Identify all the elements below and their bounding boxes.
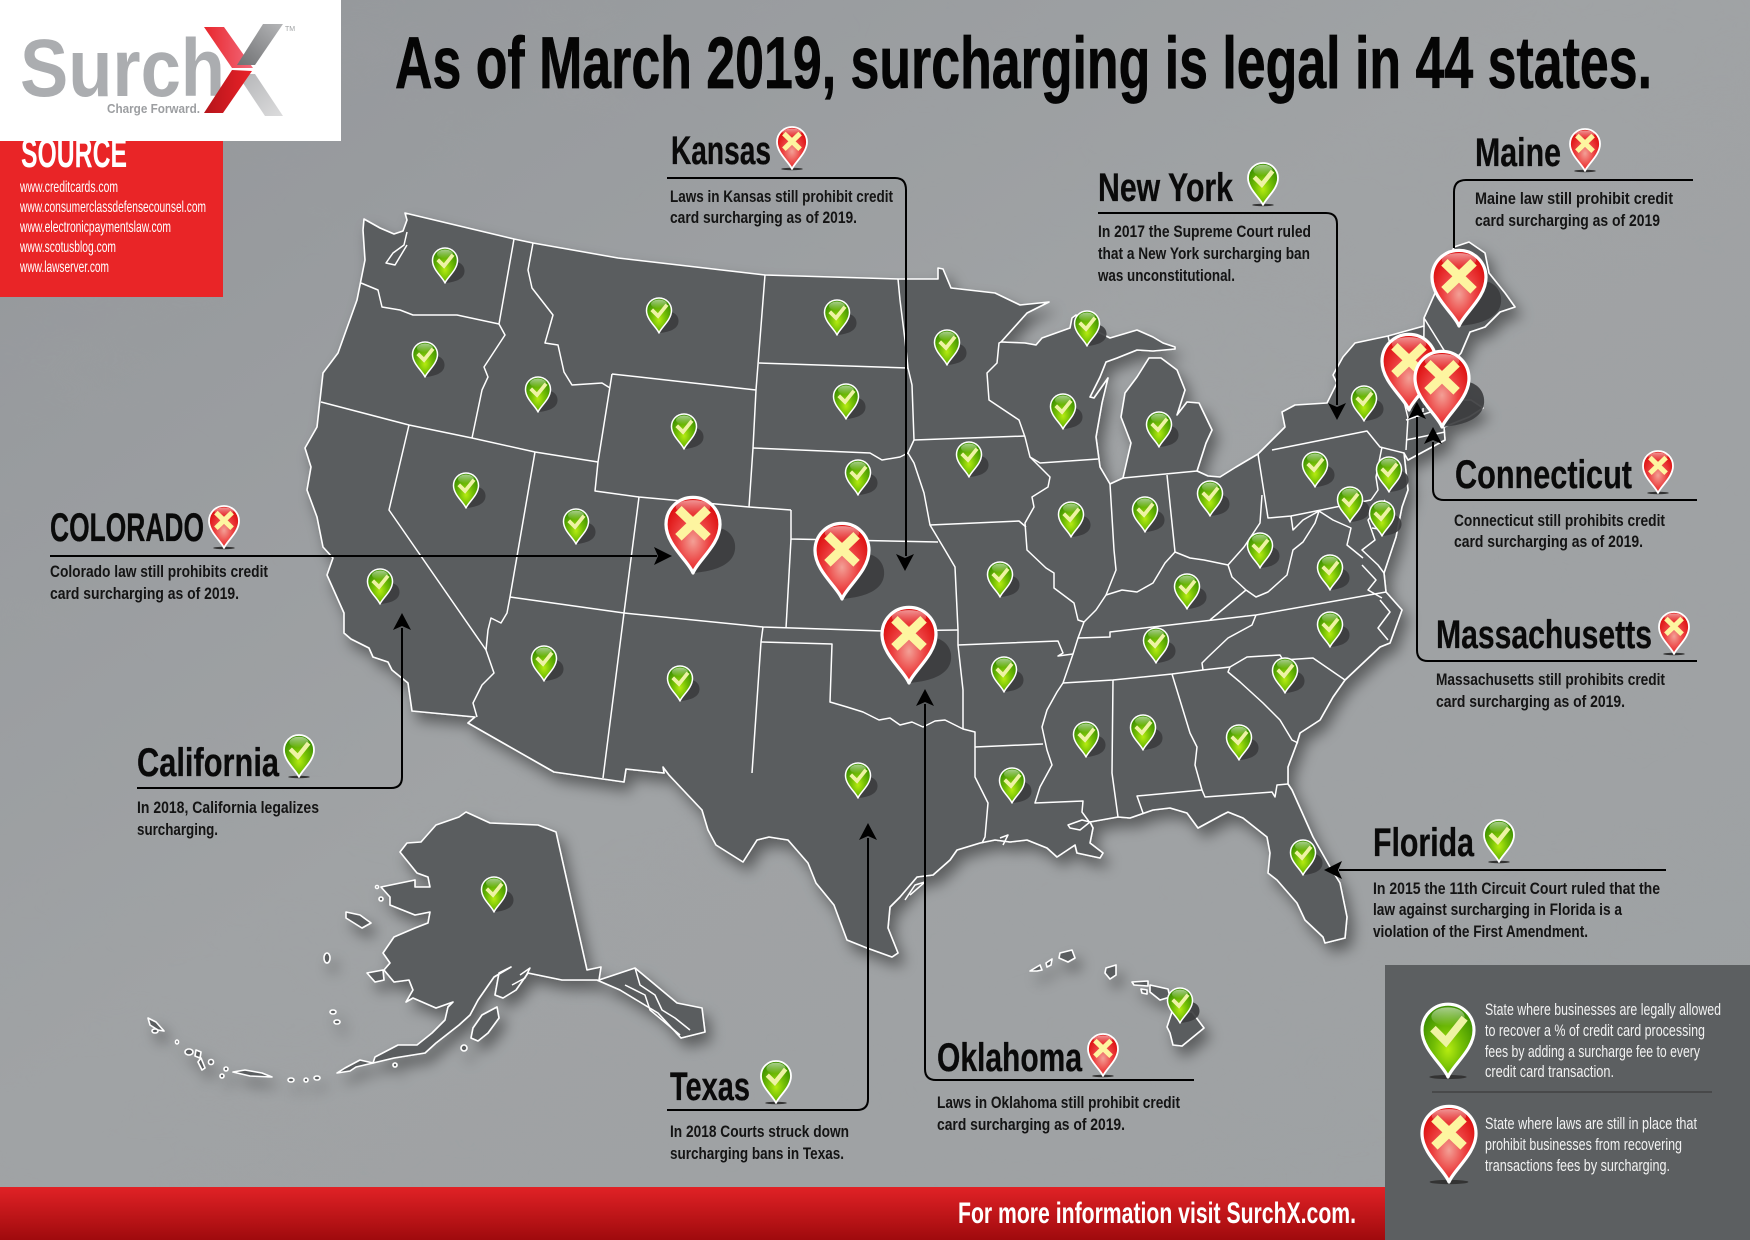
pin: Michigan xyxy=(1146,412,1179,447)
callout: New York xyxy=(1097,163,1346,420)
callout: Kansas: Kansas xyxy=(671,129,771,173)
pin: Minnesota xyxy=(934,330,967,365)
callout: Texas xyxy=(667,823,877,1163)
footer bar xyxy=(0,1187,1385,1240)
callout: Oklahoma xyxy=(916,689,1194,1134)
panel: source list: www.electronicpaymentslaw.com xyxy=(19,219,171,236)
pin: Florida xyxy=(1290,840,1323,875)
state borders xyxy=(321,232,1452,1035)
pin: Connecticut xyxy=(1415,351,1484,427)
legend text: prohibited: prohibit businesses from recovering xyxy=(1485,1135,1682,1154)
pin: North Carolina xyxy=(1318,612,1350,647)
pin: Wyoming xyxy=(672,414,704,449)
callout: New York: that a New York surcharging ban xyxy=(1098,245,1310,263)
logo: SurchX: Charge Forward. xyxy=(107,102,200,116)
pin: Michigan upper peninsula xyxy=(1074,311,1107,346)
legend text: prohibited: transactions fees by surcharging. xyxy=(1485,1156,1670,1175)
callout: California xyxy=(137,613,411,839)
legend text: legal xyxy=(1485,1000,1721,1081)
callout: Colorado: card surcharging as of 2019. xyxy=(50,585,239,603)
logo: SurchX: TM xyxy=(285,26,295,33)
pin: New York state xyxy=(1352,386,1384,421)
pin: South Carolina xyxy=(1272,658,1305,693)
pin: Virginia xyxy=(1318,555,1350,590)
logo: SurchX: Surch xyxy=(20,23,225,114)
map pins: permitted states xyxy=(368,248,1409,1023)
pin: Nebraska xyxy=(846,460,878,495)
callout: California: California xyxy=(137,741,280,785)
callout: Oklahoma: Laws in Oklahoma still prohibit credit xyxy=(937,1094,1180,1112)
callout: Massachusetts: card surcharging as of 2019. xyxy=(1436,693,1625,711)
pin: Hawaii xyxy=(1168,988,1200,1023)
pin: Idaho xyxy=(526,377,558,412)
callout: Massachusetts xyxy=(1408,402,1697,711)
pin: Pennsylvania xyxy=(1302,452,1335,487)
pin: Arkansas xyxy=(992,657,1024,692)
pin: Washington xyxy=(432,248,465,283)
callout: Oklahoma: Oklahoma xyxy=(937,1036,1083,1080)
callout: Massachusetts: Massachusetts xyxy=(1436,613,1652,657)
panel: source list: www.scotusblog.com xyxy=(19,239,116,256)
legend text: prohibited xyxy=(1485,1114,1697,1175)
pin: Utah xyxy=(564,509,596,544)
pin: Texas xyxy=(846,763,878,798)
pin: West Virginia xyxy=(1248,533,1280,568)
pin: Maine xyxy=(1432,250,1501,326)
pin: Iowa xyxy=(956,442,989,477)
callout: Florida: law against surcharging in Florida is a xyxy=(1373,901,1623,919)
callout: Florida xyxy=(1324,820,1666,941)
pin: California xyxy=(368,569,400,604)
pin: Ohio xyxy=(1198,481,1230,516)
callout: Connecticut: Connecticut still prohibits credit xyxy=(1454,512,1665,530)
panel: source list: www.lawserver.com xyxy=(19,259,109,276)
pin: Montana xyxy=(646,298,679,333)
callout: Texas: In 2018 Courts struck down xyxy=(670,1123,849,1141)
callout: California: In 2018, California legalizes xyxy=(137,799,319,817)
callout: Maine: Maine xyxy=(1475,131,1561,175)
callout: Connecticut: Connecticut xyxy=(1455,453,1632,497)
callout: Oklahoma: card surcharging as of 2019. xyxy=(937,1116,1125,1134)
pin: North Dakota xyxy=(824,300,857,335)
footer bar: For more information visit SurchX.com. xyxy=(958,1197,1356,1230)
callout: Connecticut xyxy=(1424,427,1697,551)
map pins: prohibited states xyxy=(666,250,1501,683)
callout: Colorado: Colorado law still prohibits credit xyxy=(50,563,268,581)
pin: Arizona xyxy=(532,646,564,681)
panel: source list: www.consumerclassdefensecounsel.com xyxy=(19,199,206,216)
pin: Massachusetts xyxy=(1382,334,1451,410)
pin: Tennessee xyxy=(1144,628,1176,663)
panel: legend xyxy=(1385,965,1750,1240)
callout: Florida: violation of the First Amendment. xyxy=(1373,923,1588,941)
pin: Georgia xyxy=(1226,725,1259,760)
panel: source list xyxy=(0,120,223,297)
icon: prohibited state pin xyxy=(1422,1106,1476,1184)
callout: Texas: Texas xyxy=(670,1065,750,1109)
pin: Nevada xyxy=(454,473,486,508)
pin: Alabama xyxy=(1130,715,1163,750)
callout: New York: In 2017 the Supreme Court ruled xyxy=(1098,223,1311,241)
callout: Colorado: COLORADO xyxy=(50,506,204,550)
pin: New Mexico xyxy=(668,666,700,701)
pin: Wisconsin xyxy=(1050,394,1083,429)
callout: Maine: Maine law still prohibit credit xyxy=(1475,190,1673,208)
pin: Illinois xyxy=(1058,502,1091,537)
callout: New York: New York xyxy=(1098,166,1234,210)
pin: Kansas xyxy=(815,523,884,599)
icon: legal state pin xyxy=(1422,1004,1474,1079)
legend text: legal: credit card transaction. xyxy=(1485,1062,1614,1081)
callout: Colorado xyxy=(50,506,672,603)
callout: Kansas xyxy=(667,127,914,571)
pin: Colorado xyxy=(666,497,735,573)
panel: source list: SOURCE xyxy=(21,130,127,176)
callout: Texas: surcharging bans in Texas. xyxy=(670,1145,844,1163)
callout: Maine xyxy=(1454,129,1693,248)
callout: New York: was unconstitutional. xyxy=(1097,267,1235,285)
pin: South Dakota xyxy=(834,384,866,419)
pin: Alaska xyxy=(482,877,514,912)
pin: Oklahoma xyxy=(882,607,951,683)
pin: Mississippi xyxy=(1074,722,1106,757)
pin: New Jersey xyxy=(1376,457,1409,492)
map of the United States xyxy=(148,213,1515,1082)
callout: Kansas: Laws in Kansas still prohibit credit xyxy=(670,188,893,206)
callout: Florida: In 2015 the 11th Circuit Court ruled that the xyxy=(1373,880,1660,898)
land masses xyxy=(148,213,1515,1082)
pin: Kentucky xyxy=(1174,574,1207,609)
callout: Kansas: card surcharging as of 2019. xyxy=(670,209,857,227)
pin: Missouri xyxy=(988,562,1020,597)
callout: Maine: card surcharging as of 2019 xyxy=(1475,212,1660,230)
pin: Oregon xyxy=(412,342,445,377)
panel: source list: www.creditcards.com xyxy=(19,179,118,196)
callout: Florida: Florida xyxy=(1373,821,1475,865)
callout: Connecticut: card surcharging as of 2019. xyxy=(1454,533,1643,551)
callout: California: surcharging. xyxy=(137,821,218,839)
pin: Delaware xyxy=(1370,501,1402,536)
pin: Louisiana xyxy=(1000,768,1032,803)
callout: Massachusetts: Massachusetts still prohibits credit xyxy=(1436,671,1665,689)
pin: Indiana xyxy=(1132,497,1165,532)
logo: SurchX xyxy=(0,0,341,141)
pin: Maryland xyxy=(1338,487,1370,522)
